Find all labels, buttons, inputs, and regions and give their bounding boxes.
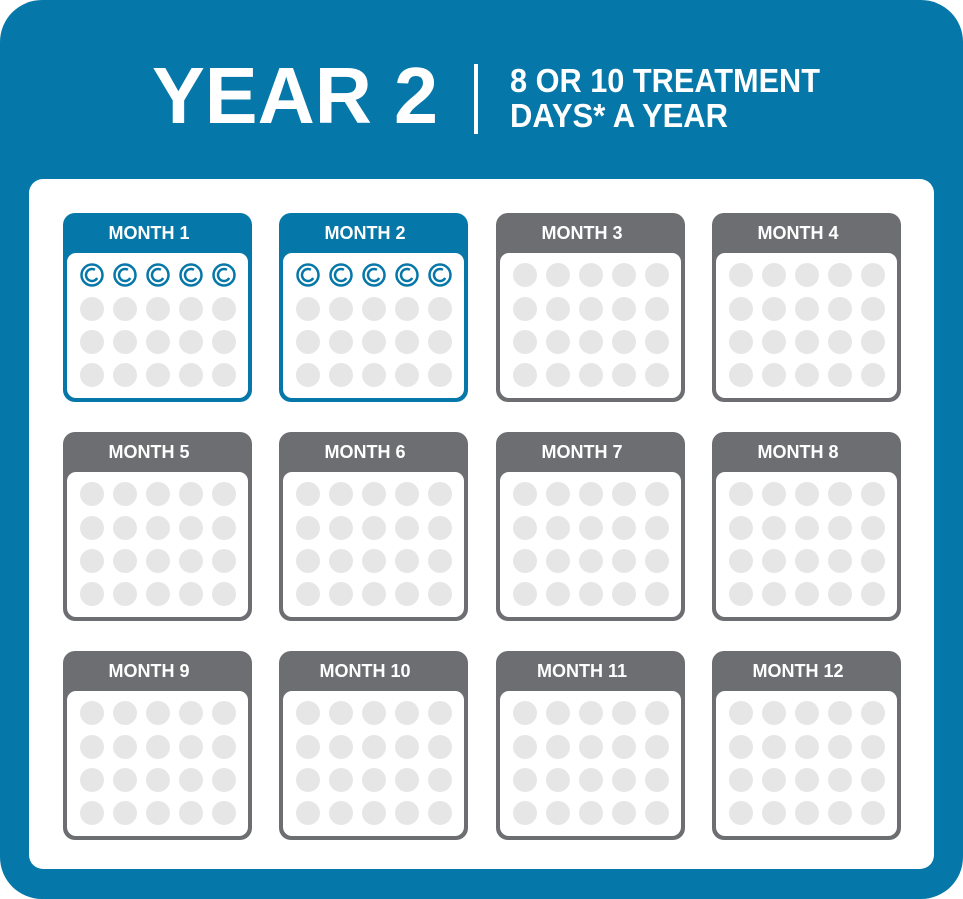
- card: month 8: [712, 432, 901, 621]
- card: month 11: [496, 651, 685, 840]
- card: month 7: [496, 432, 685, 621]
- card: month 4: [712, 213, 901, 402]
- card: month 4: MONTH 4: [758, 223, 838, 243]
- card: month 12: [712, 651, 901, 840]
- subtitle: 8 OR 10 TREATMENT: [510, 62, 820, 99]
- card: month 6: [279, 432, 468, 621]
- card: month 11: MONTH 11: [537, 661, 627, 681]
- card: month 9: MONTH 9: [108, 661, 190, 681]
- white calendar area: [29, 179, 934, 869]
- title: YEAR 2: YEAR 2: [152, 51, 438, 140]
- card: month 2: MONTH 2: [324, 223, 406, 243]
- card: month 2: [279, 213, 468, 402]
- card: month 5: MONTH 5: [108, 442, 190, 462]
- card: month 10: [279, 651, 468, 840]
- subtitle: [510, 62, 820, 134]
- card: month 7: MONTH 7: [542, 442, 622, 462]
- card: month 1: [63, 213, 252, 402]
- card: month 12: MONTH 12: [752, 661, 844, 681]
- divider: [474, 64, 478, 134]
- card: month 10: MONTH 10: [319, 661, 411, 681]
- card: month 8: MONTH 8: [758, 442, 838, 462]
- card: month 1: MONTH 1: [108, 223, 190, 243]
- card: month 3: MONTH 3: [542, 223, 622, 243]
- card: month 5: [63, 432, 252, 621]
- card: month 9: [63, 651, 252, 840]
- card: month 3: [496, 213, 685, 402]
- card: month 6: MONTH 6: [324, 442, 406, 462]
- subtitle: DAYS* A YEAR: [510, 97, 728, 134]
